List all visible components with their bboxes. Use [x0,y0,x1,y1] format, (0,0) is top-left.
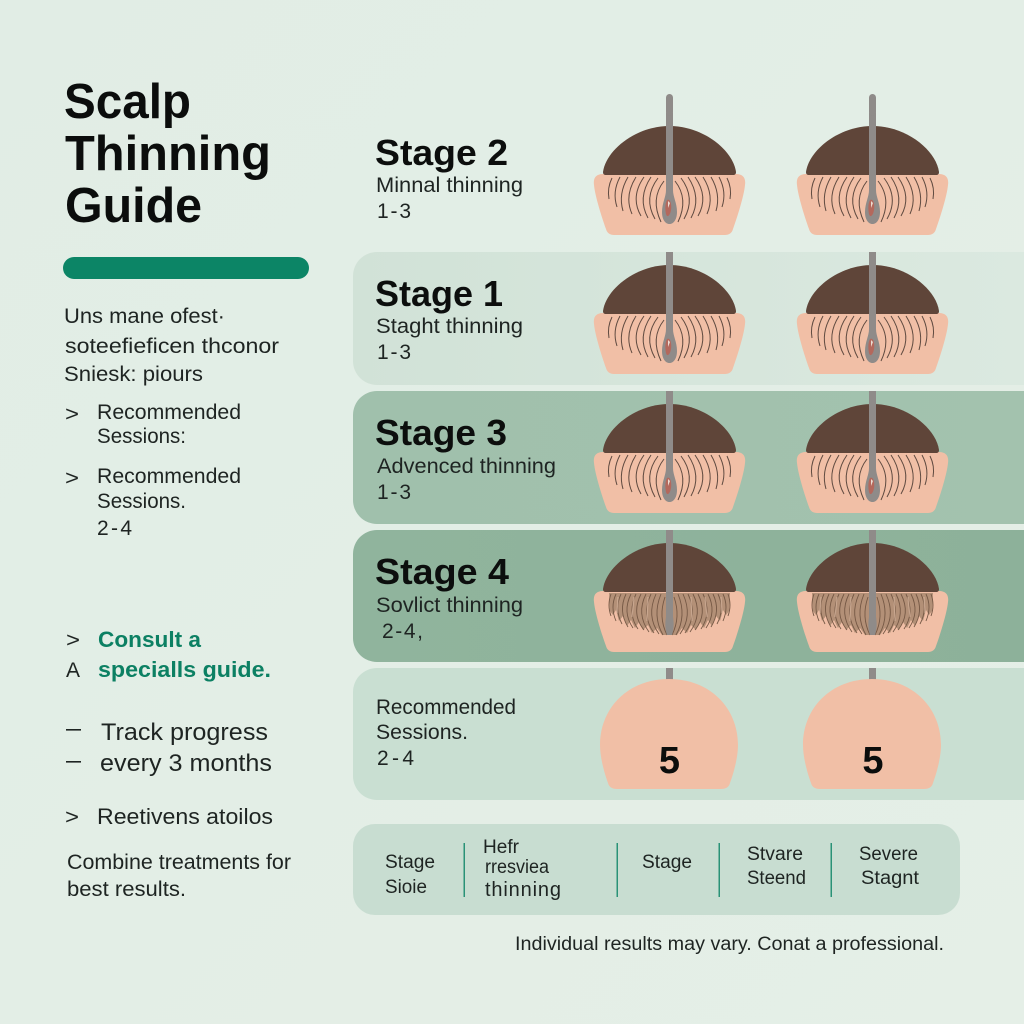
description: stage 2: Minnal thinning [376,174,523,197]
icon: scalp stage 1 right [797,252,948,374]
description: stage 5: Sessions. [376,721,468,744]
note: combine treatments [67,851,291,901]
panel: left sidebar [63,75,309,901]
panel: stage 4 row [353,530,1024,662]
icon: scalp stage 4 left [594,530,745,652]
icon: scalp stage 2 left [594,94,745,235]
intro text: Sniesk: piours [64,363,203,386]
intro text: Uns mane ofest· [64,305,225,328]
title: Guide [65,179,202,233]
callout: consult a specialist: > [66,629,80,652]
legend item 4 [747,844,806,889]
legend item 5 [859,844,920,889]
heading: stage 3: Stage 3 [375,412,507,453]
title: Thinning [65,127,271,181]
icon: scalp stage 2 right [797,94,948,235]
icon: scalp stage 3 left [594,391,745,513]
callout: consult a specialist: A [66,659,80,682]
icon: scalp stage 4 right [797,530,948,652]
title [64,75,271,233]
panel: stage 5 row [353,668,1024,800]
description: stage 1: Staght thinning [376,315,523,338]
icon: bald scalp right [803,668,941,789]
title: Scalp [64,75,191,129]
description: stage 3: Advenced thinning [377,455,556,478]
tip: track progress [66,719,272,777]
tip: retention: Reetivens atoilos [97,804,273,829]
description: stage 2 [376,174,523,223]
note: combine treatments: Combine treatments for [67,851,291,874]
list: recommended sessions: > [65,403,79,426]
legend item 1: Sioie [385,877,427,898]
row background [353,530,1024,662]
legend item 2 [483,837,561,901]
description: stage 4: Sovlict thinning [376,594,523,617]
list: recommended sessions: > [65,467,79,490]
legend item 1: Stage [385,852,435,873]
panel: legend bar [353,824,960,915]
legend item 4: Stvare [747,844,803,865]
description: stage 3 [377,455,556,504]
tip: retention: > [65,806,79,829]
description: stage 4 [376,594,523,643]
description: stage 3: 1-3 [377,481,411,504]
heading: stage 2: Stage 2 [375,132,508,173]
accent bar [63,257,309,279]
legend item 2: Hefr [483,837,520,858]
icon: scalp stage 1 left [594,252,745,374]
description: stage 5: 2-4 [377,747,414,770]
legend item 5: Stagnt [861,868,920,889]
list: recommended sessions: Recommended [97,465,241,488]
icon: bald scalp left: 5 [659,740,680,782]
callout: consult a specialist: specialls guide. [98,657,271,682]
icon: bald scalp right: 5 [862,740,884,782]
description: stage 5: Recommended [376,696,516,719]
description: stage 1: 1-3 [377,341,411,364]
list: recommended sessions: Recommended [97,401,241,424]
panel: stage 2 row [375,94,948,235]
description: stage 5 [376,696,516,770]
row background [353,391,1024,524]
tip: track progress: Track progress [101,719,268,746]
legend item 1 [385,852,435,898]
description: stage 2: 1-3 [377,200,411,223]
list: recommended sessions: 2-4 [97,517,132,540]
row background [353,668,1024,800]
row background [353,252,1024,385]
legend item 4: Steend [747,868,806,889]
callout: consult a specialist: Consult a [98,627,202,652]
panel: stage 3 row [353,391,1024,524]
intro text [64,305,279,386]
icon: bald scalp left [600,668,738,789]
panel: stage 1 row [353,252,1024,385]
intro text: soteefieficen thconor [65,335,279,358]
heading: stage 4: Stage 4 [375,551,509,592]
legend item 2: rresviea [485,857,549,878]
list: recommended sessions: Sessions: [97,425,186,448]
legend item 5: Severe [859,844,918,865]
heading: stage 1: Stage 1 [375,273,503,314]
legend item 2: thinning [485,879,561,901]
list: recommended sessions: Sessions. [97,490,186,513]
note: combine treatments: best results. [67,878,186,901]
callout: consult a specialist [66,627,271,682]
footer disclaimer: Individual results may vary. Conat a professional. [515,934,944,955]
description: stage 1 [376,315,523,364]
legend item 3: Stage [642,852,692,873]
icon: scalp stage 3 right [797,391,948,513]
list: recommended sessions [65,401,241,540]
description: stage 4: 2-4, [382,620,423,643]
tip: track progress: every 3 months [100,750,272,777]
